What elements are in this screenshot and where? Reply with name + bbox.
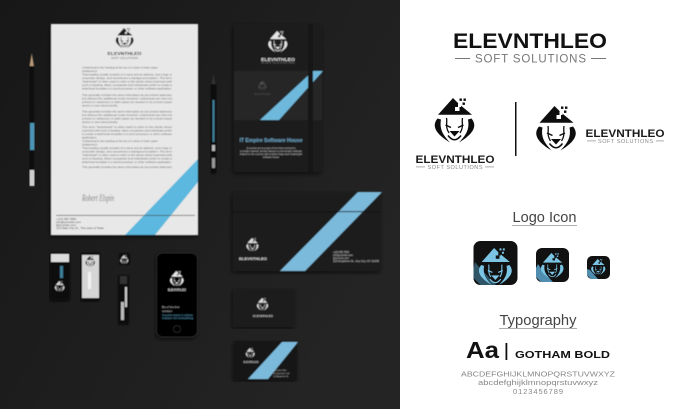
envelope flap — [233, 211, 381, 212]
notebook small logo: ELEVNTHLEO — [254, 93, 271, 96]
envelope contact text: +123 456 7890 — [333, 251, 350, 254]
main logo tagline: SOFT SOLUTIONS — [475, 54, 586, 66]
app icon: medium — [536, 248, 569, 282]
main logo wordmark — [453, 30, 607, 66]
business card: back: +123 456 7890 — [273, 370, 287, 372]
stacked logo — [416, 98, 495, 171]
letterhead blue stripe — [125, 159, 198, 235]
envelope logo: ELEVNTHLEO — [239, 256, 267, 261]
letterhead body text: corporate design, and sometimes a background pattern. The term — [82, 150, 173, 154]
horizontal logo: ELEVNTHLEO — [586, 128, 665, 140]
letterhead footer: info@yoursite.com — [56, 220, 81, 224]
phone: Complete design to software — [162, 313, 193, 317]
stacked logo: ELEVNTHLEO — [416, 154, 495, 166]
letterhead footer: 123 Main City St., The town of State — [56, 226, 104, 230]
USB drive — [118, 253, 130, 325]
letterhead body text: application. — [82, 136, 97, 140]
type specimen alphabet: 0123456789 — [513, 387, 563, 396]
letterhead logo: ELEVNTHLEO — [108, 51, 142, 56]
letterhead body text: A letterhead is the heading at the top of a sheet of letter paper — [82, 66, 158, 70]
pen — [210, 74, 216, 174]
letterhead body text: printed on stationery or plain paper as needed or by a local output — [82, 100, 172, 104]
type specimen alphabet — [461, 370, 615, 396]
heading: Logo Icon: Logo Icon — [512, 210, 576, 226]
letterhead body text: This generally includes the same information as pre-printed stationery — [82, 165, 172, 169]
letterhead body text: letterhead template in a word processor or other software application. — [82, 160, 172, 164]
envelope contact text: @yoursite.com — [333, 257, 349, 260]
letterhead body text: (stationery). — [82, 142, 98, 146]
app icon: small — [587, 256, 610, 279]
notebook description: branch in the country with a rather large and meaningful — [240, 153, 302, 156]
envelope contact text: 123 Anywhere St., Any City, NY 12345 — [333, 260, 380, 263]
notebook description: software house — [263, 156, 280, 159]
panel: letterhead — [51, 24, 198, 235]
letterhead body text: but without the additional costs involved. Letterhead can then be — [82, 113, 172, 117]
notebook blue stripe — [260, 71, 323, 120]
letterhead body text: device or sent electronically. — [82, 104, 118, 108]
letterhead logo — [108, 28, 142, 60]
type specimen heading — [466, 337, 610, 363]
panel: dark stationery mockup background — [0, 0, 400, 409]
letterhead body text: That heading usually consists of a name and an address, and a logo or — [82, 146, 172, 150]
phone: Be of the line — [162, 305, 180, 309]
phone: solution — [162, 309, 173, 313]
notebook small logo — [254, 81, 271, 96]
letterhead body text: but without the additional costs involved. Letterhead can then be — [82, 96, 172, 100]
notebook description: A reverse text is a type of text that is printed in — [247, 147, 296, 150]
letterhead signature: Robert Elspin — [81, 193, 114, 203]
phone: solution for everything — [162, 316, 193, 320]
phone: ELEVNTHLEO — [168, 288, 186, 292]
letterhead body text: "letterhead" is often used to refer to the whole sheet imprinted with — [82, 153, 172, 157]
horizontal logo — [536, 106, 665, 150]
panel: envelope — [233, 192, 382, 271]
business card: back — [234, 341, 298, 380]
envelope logo — [239, 238, 267, 261]
letterhead body text: This generally includes the same information as pre-printed stationery — [82, 110, 172, 114]
letterhead body text: such a heading. Many companies and individuals prefer to create a — [82, 83, 172, 87]
letterhead body text: That heading usually consists of a name and an address, and a logo or — [82, 72, 172, 76]
phone — [156, 253, 198, 337]
envelope contact text: info@yoursite.com — [333, 254, 353, 257]
letterhead body text: A letterhead is the heading at the top of a sheet of letter paper — [82, 139, 158, 143]
notebook description — [240, 147, 303, 159]
letterhead footer: @yoursite.com — [56, 223, 77, 227]
letterhead body text: to create a letterhead template in a word processor or other software — [82, 132, 172, 136]
notebook logo: ELEVNTHLEO — [261, 57, 295, 62]
letterhead footer: +123 456 7890 — [56, 217, 76, 221]
letterhead body text: (stationery). — [82, 69, 98, 73]
business card: front: ELEVNTHLEO — [253, 314, 274, 318]
vertical divider — [515, 102, 516, 156]
notebook logo: SOFT SOLUTIONS — [261, 62, 296, 64]
letterhead body text: corporate design, and sometimes a background pattern. The term — [82, 76, 173, 80]
notebook elastic band — [308, 24, 313, 172]
letterhead body text: letterhead template in a word processor or other software application. — [82, 86, 172, 90]
type specimen heading: Aa — [466, 337, 499, 363]
main logo wordmark: ELEVNTHLEO — [453, 30, 607, 53]
letterhead body text: imprinted with such a heading. Many companies and individuals prefer — [82, 128, 172, 132]
type specimen alphabet: abcdefghijklmnopqrstuvwxyz — [478, 378, 598, 387]
letterhead body text — [82, 66, 173, 169]
USB box: black — [50, 253, 70, 300]
heading: Typography: Typography — [500, 313, 577, 329]
business card: back: info@yoursite.com — [273, 372, 290, 375]
horizontal logo: SOFT SOLUTIONS — [598, 139, 653, 145]
letterhead body text: such a heading. Many companies and individuals prefer to create a — [82, 156, 172, 160]
business card: back: 123 Anywhere St. — [273, 375, 289, 378]
letterhead body text: This generally includes the same information as pre-printed stationery — [82, 93, 172, 97]
envelope contact text — [333, 251, 380, 263]
letterhead body text: device or sent electronically. — [82, 120, 118, 124]
notebook description: a similar material, similar features to elementary software — [240, 150, 303, 153]
business card: front — [233, 289, 295, 327]
letterhead footer — [56, 215, 195, 230]
notebook logo — [261, 31, 296, 64]
pencil — [30, 53, 34, 186]
envelope blue stripe — [280, 192, 382, 271]
business card: back: ELEVNTHLEO — [244, 360, 259, 364]
notebook title: IT Empire Software House — [240, 138, 303, 144]
stacked logo: SOFT SOLUTIONS — [428, 165, 483, 171]
type specimen heading: GOTHAM BOLD — [515, 349, 610, 361]
letterhead logo: SOFT SOLUTIONS — [111, 56, 138, 60]
USB box: white — [81, 253, 100, 300]
letterhead body text: printed on stationery or plain paper as needed or by a local output — [82, 116, 172, 120]
panel: notebook — [234, 24, 323, 172]
letterhead body text: The term "letterhead" is often used to refer to the whole sheet — [82, 125, 172, 129]
app icon: large — [474, 241, 518, 285]
type specimen alphabet: ABCDEFGHIJKLMNOPQRSTUVWXYZ — [461, 370, 615, 378]
letterhead body text: "letterhead" is often used to refer to the whole sheet imprinted with — [82, 80, 172, 84]
